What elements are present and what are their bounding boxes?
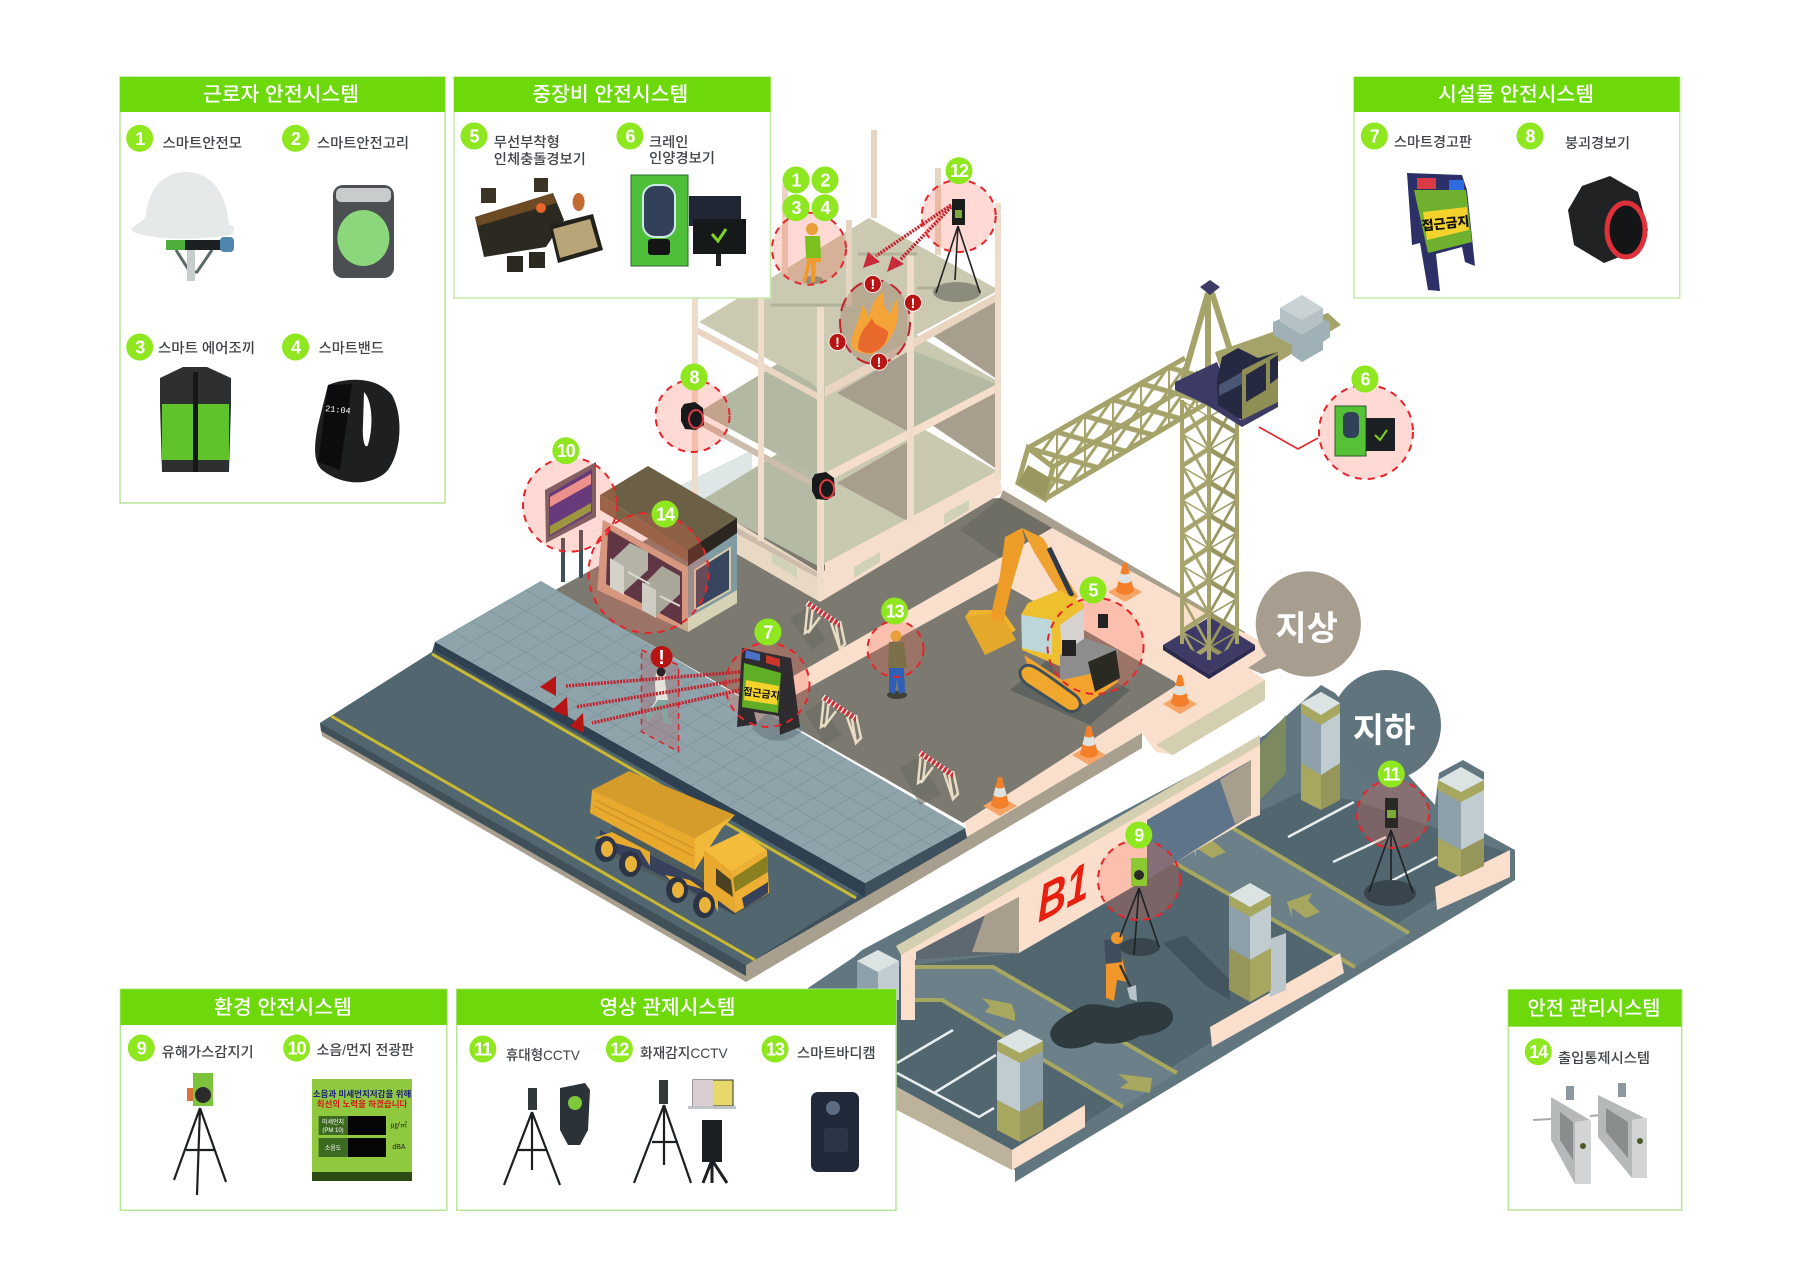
scene number badges: 1: [791, 170, 801, 190]
attached collision alarm: [1088, 650, 1120, 692]
scene number badges: 10: [557, 441, 576, 461]
dump truck: [590, 771, 770, 918]
item 7 smart warning sign: [1361, 122, 1475, 291]
turnstile gates: [610, 543, 680, 618]
panel: safety management: 안전 관리시스템: [1528, 997, 1660, 1020]
fire alert icons: !: [870, 276, 875, 292]
item 12 fire detection CCTV: 화재감지CCTV: [640, 1045, 728, 1061]
item 13 body cam: 13: [766, 1040, 785, 1060]
road barriers: [790, 600, 958, 805]
item 10 noise and dust display: (PM 10): [322, 1128, 344, 1134]
item 14 access control: [1525, 1038, 1650, 1184]
pedestrian zone and alert: !: [658, 647, 665, 669]
item 7 smart warning sign: 스마트경고판: [1394, 134, 1472, 150]
underground bubble: 지하: [1353, 712, 1415, 750]
pedestrian zone and alert: [540, 646, 740, 752]
worker with wearable devices: [803, 223, 823, 284]
scene number badges: [552, 157, 1405, 848]
marker tint areas: [523, 180, 1429, 920]
basement driveways: [1147, 798, 1409, 967]
panel: heavy equipment safety: 중장비 안전시스템: [532, 83, 688, 106]
basement parking: [808, 685, 1515, 1182]
item 10 noise and dust display: 10: [288, 1038, 307, 1058]
item 9 gas detector: 9: [137, 1038, 147, 1058]
item 14 access control: 출입통제시스템: [1558, 1050, 1650, 1066]
scene number badges: 12: [950, 161, 969, 181]
item 3 air vest: 3: [135, 338, 145, 358]
fire alert icons: !: [835, 334, 840, 350]
item 10 noise and dust display: 소음도: [325, 1145, 342, 1152]
crane alarm in marker: [1335, 406, 1395, 456]
item 6 crane alarm: 크레인: [649, 134, 688, 150]
connector from crane to marker: [1259, 427, 1318, 449]
item 14 access control: 14: [1529, 1042, 1548, 1062]
digging worker: [1104, 932, 1137, 1001]
B1 lettering: B1: [1038, 850, 1088, 934]
construction site ground slab: [555, 490, 1275, 837]
panel: safety management: [1508, 990, 1682, 1210]
item 7 smart warning sign: 7: [1370, 126, 1380, 146]
crane mast lattice: [1182, 400, 1209, 660]
fire detection CCTV rays: [863, 205, 951, 272]
scene number badges: 7: [763, 622, 773, 642]
top slab: [699, 218, 999, 387]
item 10 noise and dust display: dBA: [392, 1144, 406, 1151]
scene number badges: 8: [689, 368, 699, 388]
safety cones: [983, 563, 1197, 816]
fire alert icons: !: [911, 295, 915, 311]
peach divider strip: [790, 528, 1275, 698]
crane jib lattice: [1028, 358, 1203, 467]
item 11 portable CCTV: 11: [474, 1040, 492, 1060]
item 4 smart band: 스마트밴드: [319, 340, 384, 356]
item 5 collision alarm: 인체충돌경보기: [494, 151, 586, 167]
item 4 smart band: [282, 334, 399, 482]
panel: video monitoring: [457, 989, 896, 1210]
parking lines: [897, 802, 1437, 1117]
item 4 smart band: 21:04: [325, 404, 351, 417]
item 4 smart band: 4: [291, 338, 301, 358]
scene number badges: 6: [1360, 370, 1370, 390]
item 8 collapse alarm: 붕괴경보기: [1565, 135, 1630, 151]
panel: environment safety: [120, 989, 447, 1210]
ground floor base: [695, 497, 820, 602]
road and ground base: [320, 642, 1142, 982]
building frame: [650, 130, 1002, 602]
item 12 fire detection CCTV: 12: [610, 1040, 629, 1060]
truck bed: [592, 771, 735, 838]
scene number badges: 11: [1383, 764, 1401, 784]
item 9 gas detector: [128, 1034, 254, 1195]
above ground bubble: 지상: [1275, 610, 1338, 648]
truck wheels: [594, 832, 650, 866]
item 6 crane alarm: 인양경보기: [649, 150, 715, 166]
truck cab: [704, 832, 767, 872]
counter jib and weights: [1215, 313, 1341, 385]
item 3 air vest: [126, 334, 255, 472]
worker with body cam: [887, 630, 907, 699]
tower crane: [1018, 280, 1341, 679]
operator cabin: [1175, 362, 1278, 427]
electronic display board: [545, 462, 596, 582]
basement entry wall: [901, 743, 1260, 1020]
sign wording: 접근금지: [1421, 214, 1470, 233]
item 10 noise and dust display: ㎍/㎥: [391, 1120, 407, 1130]
alert icon: [651, 646, 673, 668]
excavator: [965, 528, 1120, 712]
pedestrian: [646, 669, 672, 724]
panel: heavy equipment safety: [454, 77, 770, 298]
item 5 collision alarm: 5: [469, 126, 479, 146]
item 6 crane alarm: [616, 122, 746, 266]
collapse sensors in building: [681, 402, 835, 500]
item 3 air vest: 스마트 에어조끼: [158, 340, 255, 356]
item 1 smart helmet: 1: [135, 129, 145, 149]
item 10 noise and dust display: [283, 1034, 414, 1181]
marker dashed outlines: [523, 180, 1429, 920]
warning rays: [566, 672, 740, 723]
pillar in front of underground bubble: [1301, 692, 1340, 775]
item 11 portable CCTV: 휴대형CCTV: [506, 1047, 581, 1063]
item 9 gas detector: 유해가스감지기: [162, 1044, 254, 1060]
level 1 floor: [699, 398, 999, 567]
low walls: [1210, 953, 1344, 1047]
direction arrows: [982, 833, 1320, 1093]
pillars: [1301, 692, 1340, 775]
sidewalk tiles: [435, 581, 967, 897]
above ground bubble: [1248, 571, 1361, 677]
scene number badges: 9: [1134, 826, 1144, 846]
oil spill: [1050, 1002, 1173, 1048]
scene number badges: 14: [656, 504, 675, 524]
panel: worker safety: [120, 77, 445, 503]
tripod devices in the scene: [933, 199, 1416, 956]
underground bubble: [1331, 670, 1441, 780]
scene number badges: 13: [886, 602, 905, 622]
item 11 portable CCTV: [469, 1036, 590, 1185]
item 10 noise and dust display: 소음과 미세먼지저감을 위해: [313, 1089, 411, 1099]
crane top frame: [1183, 293, 1230, 397]
item 5 collision alarm: [460, 122, 603, 272]
scene number badges: 3: [791, 198, 801, 218]
scene number badges: 5: [1088, 580, 1098, 600]
item 8 collapse alarm: [1516, 122, 1648, 263]
fire alert icons: [829, 276, 922, 370]
back walls upper: [837, 350, 911, 433]
sign text: 접근금지: [742, 686, 780, 703]
item 2 smart hook: 스마트안전고리: [317, 135, 409, 151]
panel: facility safety: 시설물 안전시스템: [1438, 83, 1594, 106]
smart warning sign in scene: [737, 648, 805, 741]
panel: environment safety: 환경 안전시스템: [214, 996, 352, 1019]
level 2 floor: [699, 308, 999, 477]
base windows: [772, 500, 969, 578]
item 10 noise and dust display: 소음/먼지 전광판: [316, 1042, 414, 1058]
item 10 noise and dust display: 최선의 노력을 하겠습니다: [317, 1099, 408, 1109]
panel: worker safety: 근로자 안전시스템: [203, 83, 359, 106]
road surface: [320, 652, 862, 965]
item 2 smart hook: [282, 125, 409, 278]
panel: video monitoring: 영상 관제시스템: [600, 996, 736, 1019]
item 10 noise and dust display: 미세먼지: [322, 1118, 344, 1126]
item 1 smart helmet: [126, 125, 242, 281]
item 8 collapse alarm: 8: [1525, 126, 1535, 146]
item 13 body cam: 스마트바디캠: [797, 1045, 876, 1061]
workers in the scene: [803, 223, 1137, 1001]
scene number badges: 2: [820, 170, 830, 190]
item 1 smart helmet: 스마트안전모: [162, 135, 242, 151]
item 6 crane alarm: 6: [625, 126, 635, 146]
item 13 body cam: [762, 1036, 876, 1172]
fire alert icons: !: [877, 354, 881, 370]
panel: facility safety: [1354, 77, 1680, 298]
item 2 smart hook: 2: [291, 129, 301, 149]
columns: [692, 203, 1001, 600]
scene number badges: 4: [820, 198, 830, 218]
item 5 collision alarm: 무선부착형: [494, 134, 560, 150]
item 12 fire detection CCTV: [606, 1036, 736, 1183]
booth: [597, 466, 737, 632]
fire: [851, 291, 898, 354]
